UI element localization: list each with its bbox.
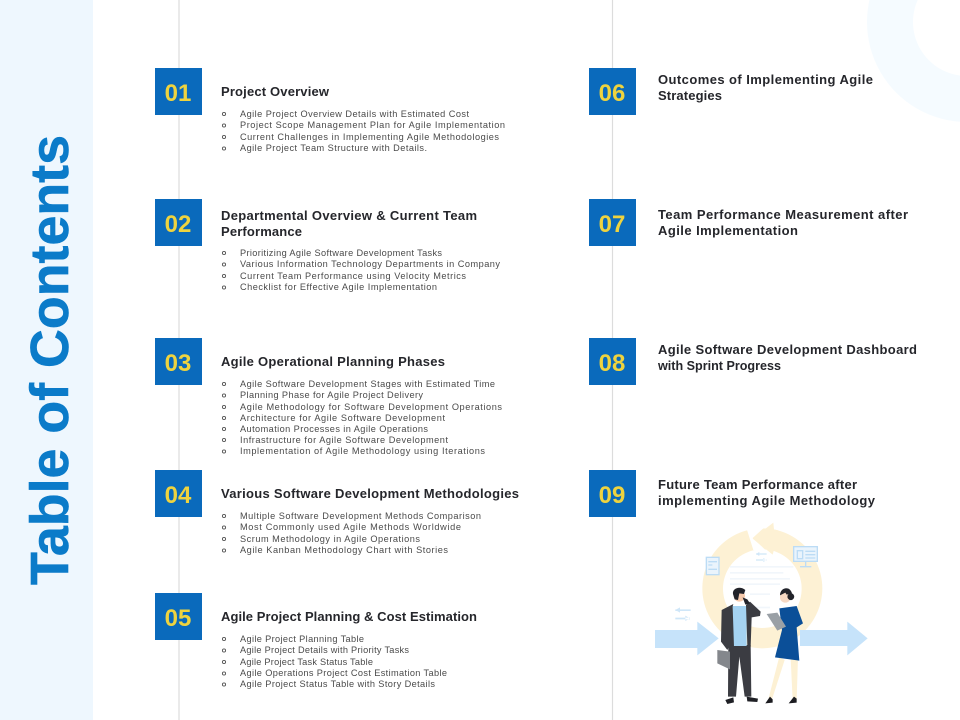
- woman: [765, 588, 803, 703]
- icon: exchange arrows left: [675, 607, 691, 621]
- faint chart text lines: [730, 566, 793, 608]
- section 07: [589, 199, 908, 246]
- bullet list 03: Planning Phase for Agile Project Delivery: [240, 390, 423, 400]
- heading 06: Outcomes of Implementing Agile: [658, 72, 873, 87]
- bullet list 01: Current Challenges in Implementing Agile Methodologies: [240, 132, 499, 142]
- section 08: [589, 338, 917, 385]
- briefcase: [717, 650, 730, 669]
- number badge 05: [155, 593, 202, 640]
- heading 07: [658, 207, 908, 238]
- bullet list 03: Implementation of Agile Methodology using Iterations: [240, 446, 485, 456]
- title: Table of Contents: [20, 135, 80, 585]
- number badge 06: 06: [599, 80, 625, 107]
- number badge 06: [589, 68, 636, 115]
- section 05: [155, 593, 477, 689]
- number badge 01: 01: [165, 80, 191, 107]
- heading 08: with Sprint Progress: [657, 358, 781, 373]
- decorative ring top right: [867, 0, 960, 122]
- bullet list 05: Agile Project Details with Priority Tasks: [240, 645, 409, 655]
- bullet list 02: Various Information Technology Departments in Company: [240, 259, 500, 269]
- heading 02: [221, 208, 477, 239]
- icon: exchange arrows upper: [756, 552, 767, 562]
- left title band: [0, 0, 93, 720]
- heading 04: Various Software Development Methodologies: [221, 486, 519, 501]
- bullet list 02: Checklist for Effective Agile Implementation: [240, 282, 437, 292]
- number badge 05: 05: [165, 605, 191, 632]
- heading 06: Strategies: [658, 88, 722, 103]
- bullet list 04: Agile Kanban Methodology Chart with Stories: [240, 545, 448, 555]
- ring arrowhead gap: [746, 520, 773, 557]
- section 02: [155, 199, 500, 292]
- number badge 03: [155, 338, 202, 385]
- bullet list 05: [222, 634, 447, 689]
- man: [717, 588, 761, 704]
- bullet list 03: Agile Software Development Stages with Estimated Time: [240, 379, 495, 389]
- heading 09: [658, 477, 876, 508]
- heading 07: Team Performance Measurement after: [658, 207, 908, 222]
- heading 05: Agile Project Planning & Cost Estimation: [221, 609, 477, 624]
- number badge 07: [589, 199, 636, 246]
- number badge 07: 07: [599, 211, 625, 238]
- arrow out: [800, 622, 868, 655]
- number badge 02: [155, 199, 202, 246]
- heading 03: Agile Operational Planning Phases: [221, 354, 445, 369]
- bullet list 01: [222, 109, 505, 153]
- heading 06: [658, 72, 873, 103]
- number badge 04: 04: [165, 482, 192, 509]
- section 01: [155, 68, 505, 153]
- number badge 02: 02: [165, 211, 191, 238]
- bullet list 01: Agile Project Overview Details with Estimated Cost: [240, 109, 469, 119]
- number badge 03: 03: [165, 350, 191, 377]
- illustration: two colleagues with agile cycle: [655, 520, 868, 704]
- bullet list 03: Architecture for Agile Software Development: [240, 413, 445, 423]
- section 04: [155, 470, 519, 555]
- bullet list 04: Scrum Methodology in Agile Operations: [240, 534, 420, 544]
- bullet list 03: Automation Processes in Agile Operations: [240, 424, 428, 434]
- number badge 04: [155, 470, 202, 517]
- heading 07: Agile Implementation: [658, 223, 798, 238]
- heading 09: Future Team Performance after: [658, 477, 857, 492]
- bullet list 05: Agile Operations Project Cost Estimation Table: [240, 668, 447, 678]
- bullet list 02: Prioritizing Agile Software Development Tasks: [240, 248, 442, 258]
- number badge 09: [589, 470, 636, 517]
- bullet list 03: Infrastructure for Agile Software Development: [240, 435, 448, 445]
- bullet list 05: Agile Project Planning Table: [240, 634, 364, 644]
- bullet list 01: Project Scope Management Plan for Agile Implementation: [240, 120, 505, 130]
- cycle ring: [702, 528, 822, 648]
- heading 02: Performance: [221, 224, 302, 239]
- heading 02: Departmental Overview & Current Team: [221, 208, 477, 223]
- bullet list 03: [222, 379, 502, 456]
- heading 08: Agile Software Development Dashboard: [658, 342, 917, 357]
- bullet list 04: Most Commonly used Agile Methods Worldwide: [240, 522, 461, 532]
- bullet list 04: [222, 511, 481, 555]
- heading 08: [657, 342, 917, 373]
- section 06: [589, 68, 873, 115]
- bullet list 02: [222, 248, 500, 292]
- bullet list 05: Agile Project Status Table with Story Details: [240, 679, 435, 689]
- icon: document: [706, 557, 719, 575]
- section 09: [589, 470, 876, 517]
- heading 09: implementing Agile Methodology: [658, 493, 876, 508]
- bullet list 02: Current Team Performance using Velocity Metrics: [240, 271, 466, 281]
- arrow in: [655, 622, 719, 655]
- heading 01: Project Overview: [221, 84, 330, 99]
- icon: monitor: [794, 547, 817, 567]
- bullet list 04: Multiple Software Development Methods Comparison: [240, 511, 481, 521]
- number badge 09: 09: [599, 482, 625, 509]
- number badge 08: 08: [599, 350, 625, 377]
- number badge 08: [589, 338, 636, 385]
- bullet list 03: Agile Methodology for Software Development Operations: [240, 402, 502, 412]
- number badge 01: [155, 68, 202, 115]
- bullet list 01: Agile Project Team Structure with Details.: [240, 143, 427, 153]
- section 03: [155, 338, 502, 456]
- bullet list 05: Agile Project Task Status Table: [240, 657, 373, 667]
